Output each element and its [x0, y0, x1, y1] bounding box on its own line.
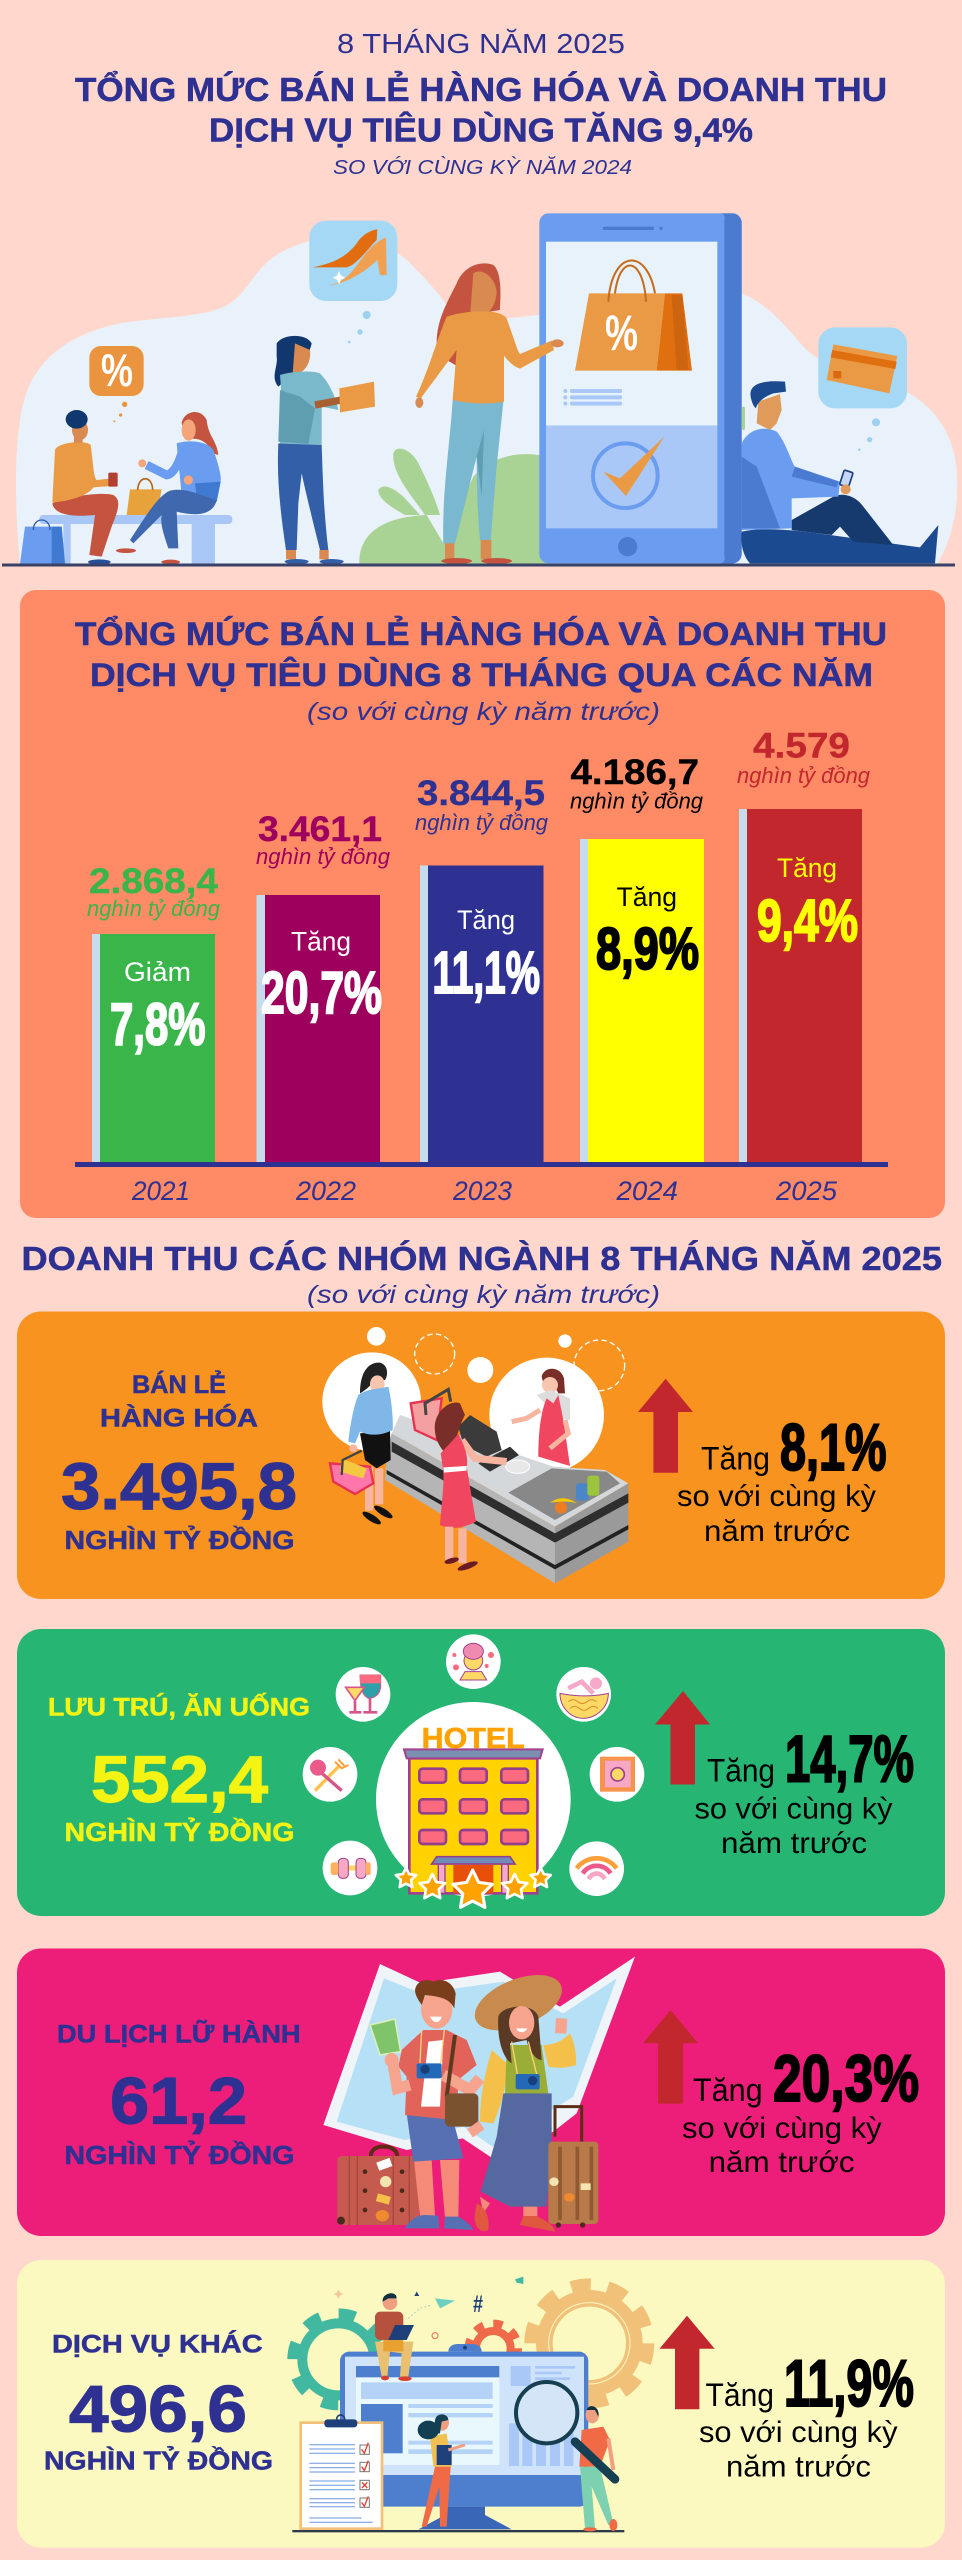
bar 2022: nghìn tỷ đồng: [256, 844, 391, 869]
subtitle: SO VỚI CÙNG KỲ NĂM 2024: [333, 156, 632, 179]
bar 2024: 8,9%: [596, 916, 699, 982]
bar 2025: nghìn tỷ đồng: [737, 763, 871, 788]
services growth: năm trước: [726, 2450, 871, 2484]
year labels: 2024: [615, 1176, 678, 1206]
year labels: 2025: [775, 1176, 838, 1206]
panel: travel: [17, 1948, 945, 2236]
retail growth: 8,1%: [780, 1410, 886, 1484]
retail label: HÀNG HÓA: [100, 1402, 258, 1432]
travel unit: NGHÌN TỶ ĐỒNG: [64, 2140, 294, 2170]
panel: accommodation and food: [17, 1629, 945, 1916]
chart heading: TỔNG MỨC BÁN LẺ HÀNG HÓA VÀ DOANH THU: [75, 616, 887, 652]
retail label: BÁN LẺ: [132, 1369, 226, 1399]
illustration: hotel and amenities: [303, 1634, 644, 1907]
accommodation growth: năm trước: [721, 1827, 867, 1860]
header titles: [75, 28, 887, 179]
travel growth: 20,3%: [773, 2041, 919, 2115]
bar 2023: 11,1%: [432, 940, 540, 1006]
retail unit: NGHÌN TỶ ĐỒNG: [64, 1525, 294, 1555]
travel value: 61,2: [110, 2064, 247, 2138]
bar 2025: Tăng: [777, 853, 837, 883]
bar 2023: [415, 774, 549, 1162]
travel growth: Tăng: [693, 2072, 763, 2108]
bar 2024: Tăng: [616, 882, 677, 912]
illustration: monitor, gears and team: [292, 2277, 647, 2532]
accommodation arrow: [655, 1691, 710, 1784]
main title: [75, 71, 887, 148]
services growth: Tăng: [706, 2377, 774, 2413]
bar 2025: 9,4%: [757, 888, 858, 954]
year labels: 2022: [295, 1176, 356, 1206]
services unit: NGHÌN TỶ ĐỒNG: [44, 2446, 273, 2476]
bar 2021: [87, 862, 221, 1162]
chart axis: [75, 1162, 888, 1167]
services value: 496,6: [69, 2371, 247, 2445]
bar 2021: 7,8%: [110, 992, 206, 1058]
services arrow: [660, 2316, 715, 2409]
main title: TỔNG MỨC BÁN LẺ HÀNG HÓA VÀ DOANH THU: [75, 71, 887, 108]
hash symbol: #: [473, 2291, 483, 2318]
retail arrow: [638, 1379, 693, 1473]
retail growth: Tăng: [701, 1440, 770, 1476]
kicker: 8 THÁNG NĂM 2025: [337, 28, 625, 59]
chart heading: [75, 616, 887, 693]
retail growth: so với cùng kỳ: [677, 1480, 876, 1513]
bar 2023: 3.844,5: [417, 774, 545, 813]
bar 2022: Tăng: [291, 926, 351, 956]
bar 2024: nghìn tỷ đồng: [570, 789, 704, 814]
travel growth: [682, 2041, 919, 2179]
retail growth: năm trước: [704, 1515, 850, 1548]
panel: other services: [17, 2260, 945, 2548]
bar 2025: 4.579: [753, 727, 850, 766]
services growth: so với cùng kỳ: [699, 2416, 898, 2449]
bar 2021: nghìn tỷ đồng: [87, 896, 221, 921]
bar 2021: 2.868,4: [89, 862, 219, 901]
chart heading: DỊCH VỤ TIÊU DÙNG 8 THÁNG QUA CÁC NĂM: [90, 657, 873, 693]
accommodation growth: Tăng: [707, 1753, 775, 1789]
percent signs in bubble and bag: %: [101, 344, 133, 396]
retail value: 3.495,8: [61, 1449, 297, 1523]
accommodation growth: [694, 1722, 914, 1860]
percent signs in bubble and bag: [101, 305, 638, 396]
bar 2022: 20,7%: [261, 960, 382, 1026]
illustration: tourists with map: [323, 1957, 635, 2232]
bar 2023: nghìn tỷ đồng: [415, 810, 549, 835]
hotel sign: HOTEL: [422, 1723, 525, 1755]
chart subheading: (so với cùng kỳ năm trước): [307, 698, 660, 726]
accommodation growth: so với cùng kỳ: [694, 1792, 892, 1825]
retail growth: [677, 1410, 886, 1548]
year labels: 2023: [452, 1176, 512, 1206]
panel: yearly totals chart: [20, 590, 945, 1218]
travel arrow: [643, 2010, 698, 2104]
accommodation unit: NGHÌN TỶ ĐỒNG: [64, 1817, 294, 1847]
services growth: [699, 2346, 914, 2484]
section heading: [22, 1240, 942, 1309]
year labels: 2021: [131, 1176, 190, 1206]
year labels: [131, 1176, 838, 1206]
bar 2022: [256, 810, 391, 1162]
bar 2024: 4.186,7: [570, 753, 699, 792]
illustration: checkout counter: [322, 1327, 628, 1583]
travel growth: so với cùng kỳ: [682, 2112, 882, 2145]
section subheading: (so với cùng kỳ năm trước): [307, 1281, 660, 1309]
bar 2024: [570, 753, 704, 1162]
section heading: DOANH THU CÁC NHÓM NGÀNH 8 THÁNG NĂM 2025: [22, 1240, 942, 1277]
travel growth: năm trước: [709, 2146, 855, 2179]
hero illustration: shoppers and phone: [2, 213, 957, 566]
bar 2021: Giảm: [124, 957, 191, 987]
retail label: [100, 1369, 258, 1432]
bar 2023: Tăng: [457, 905, 515, 935]
percent signs in bubble and bag: %: [605, 305, 638, 361]
accommodation value: 552,4: [91, 1742, 268, 1816]
panel: retail: [17, 1312, 945, 1599]
main title: DỊCH VỤ TIÊU DÙNG TĂNG 9,4%: [209, 112, 753, 148]
services growth: 11,9%: [784, 2346, 914, 2420]
bar 2025: [737, 727, 871, 1162]
accommodation label: LƯU TRÚ, ĂN UỐNG: [48, 1692, 310, 1722]
travel label: DU LỊCH LỮ HÀNH: [57, 2018, 301, 2048]
services label: DỊCH VỤ KHÁC: [52, 2330, 263, 2359]
ground line: [2, 564, 955, 566]
bar 2022: 3.461,1: [258, 810, 382, 849]
